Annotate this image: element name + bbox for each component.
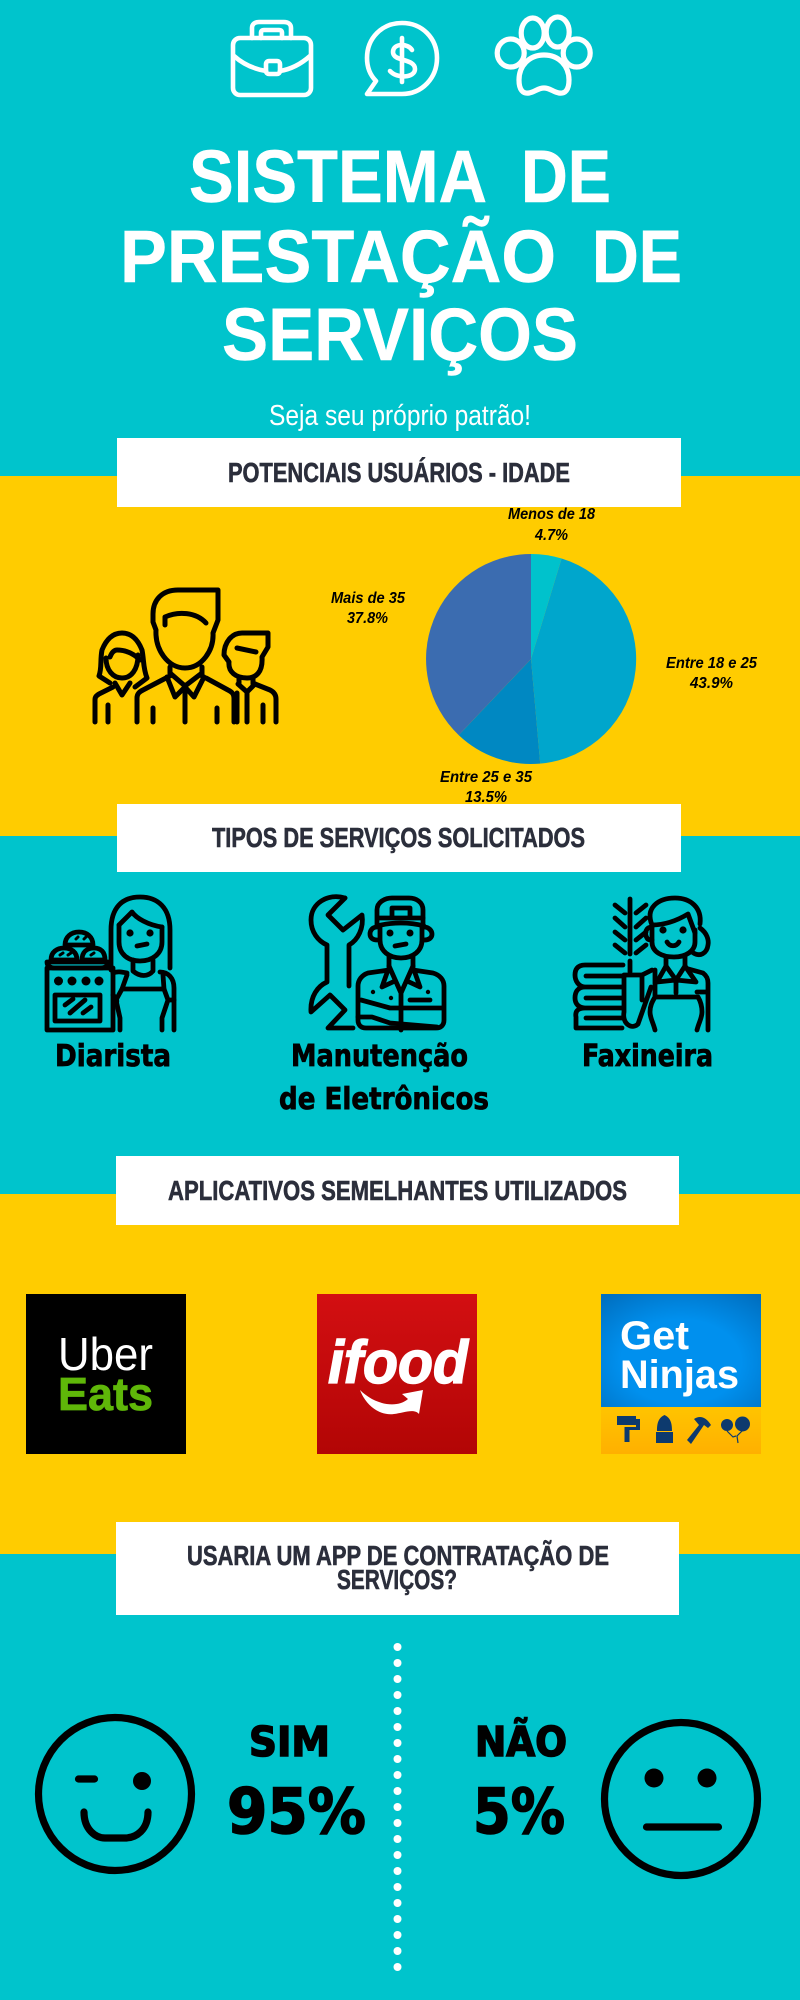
slice: mais de 35 [426, 554, 531, 735]
slice: menos de 18 [531, 554, 562, 659]
label: diarista: Diarista [55, 1039, 171, 1074]
title: SISTEMA [189, 135, 487, 218]
icon: dollar speech bubble [367, 23, 437, 94]
value: 5%: 5% [473, 1775, 565, 1848]
dotted divider [394, 1643, 402, 1971]
pie label: mais de 35 [331, 590, 405, 627]
icon: diarista with oven [47, 897, 174, 1030]
pie label: menos de 18: 4.7% [534, 527, 568, 544]
pie label: entre 25 e 35: Entre 25 e 35 [440, 769, 532, 786]
pie label: menos de 18: Menos de 18 [508, 506, 595, 523]
icon: group of people [95, 590, 276, 722]
logo: uber eats [26, 1294, 186, 1454]
icon: hammer [687, 1417, 711, 1444]
logo: getninjas: Get [620, 1314, 689, 1358]
label: faxineira: Faxineira [582, 1039, 713, 1074]
logo: ifood: ifood [328, 1329, 469, 1396]
icon: ninja worker [656, 1415, 673, 1443]
heading: aplicativos semelhantes: APLICATIVOS SEMELHANTES UTILIZADOS [168, 1175, 627, 1206]
icon: briefcase [233, 22, 311, 95]
icon: faxineira with towels and plant [575, 898, 708, 1030]
icon: neutral face [604, 1722, 758, 1876]
icon: balloons [721, 1416, 750, 1443]
heading: usaria um app: SERVIÇOS? [337, 1564, 457, 1595]
label: manutenção de eletrônicos [279, 1039, 489, 1117]
pie label: entre 18 e 25: Entre 18 e 25 [666, 655, 757, 672]
title: PRESTAÇÃO [120, 215, 556, 298]
value: 95%: 95% [227, 1775, 366, 1848]
pie label: entre 18 e 25: 43.9% [689, 675, 733, 692]
pie label: mais de 35: 37.8% [347, 610, 388, 627]
title: DE [521, 135, 611, 218]
title: DE [592, 215, 682, 298]
pie label: entre 25 e 35: 13.5% [465, 789, 507, 806]
heading: aplicativos semelhantes [116, 1156, 679, 1225]
logo: ifood [317, 1294, 477, 1454]
pie label: mais de 35: Mais de 35 [331, 590, 405, 607]
subtitle: Seja seu próprio patrão! [269, 400, 531, 432]
title: SERVIÇOS [222, 293, 578, 376]
heading: usaria um app: USARIA UM APP DE CONTRATAÇÃO DE [187, 1540, 609, 1571]
icon: winking smiley [38, 1718, 192, 1870]
pie chart [426, 554, 636, 764]
heading: tipos de serviços [117, 804, 681, 872]
logo: getninjas [601, 1294, 761, 1454]
heading: usaria um app [116, 1522, 679, 1615]
heading: tipos de serviços: TIPOS DE SERVIÇOS SOLICITADOS [212, 822, 585, 853]
logo: uber eats: Eats [58, 1368, 153, 1420]
title [120, 135, 682, 376]
icon: technician with wrench [311, 897, 444, 1030]
logo: getninjas: Ninjas [620, 1353, 739, 1397]
pie label: entre 18 e 25 [666, 655, 757, 692]
pie label: menos de 18 [508, 506, 595, 544]
heading: potenciais usuários: POTENCIAIS USUÁRIOS - IDADE [228, 457, 570, 488]
label: sim: SIM [249, 1718, 330, 1766]
label: não: NÃO [475, 1717, 567, 1766]
label: manutenção de eletrônicos: de Eletrônicos [279, 1082, 489, 1117]
icon: paw print [497, 17, 590, 93]
pie label: entre 25 e 35 [440, 769, 532, 806]
logo: uber eats: Uber [58, 1328, 153, 1380]
icon: paint roller [617, 1416, 640, 1442]
slice: entre 18 e 25 [531, 558, 636, 764]
slice: entre 25 e 35 [459, 659, 540, 764]
label: manutenção de eletrônicos: Manutenção [291, 1039, 468, 1074]
heading: potenciais usuários [117, 438, 681, 507]
